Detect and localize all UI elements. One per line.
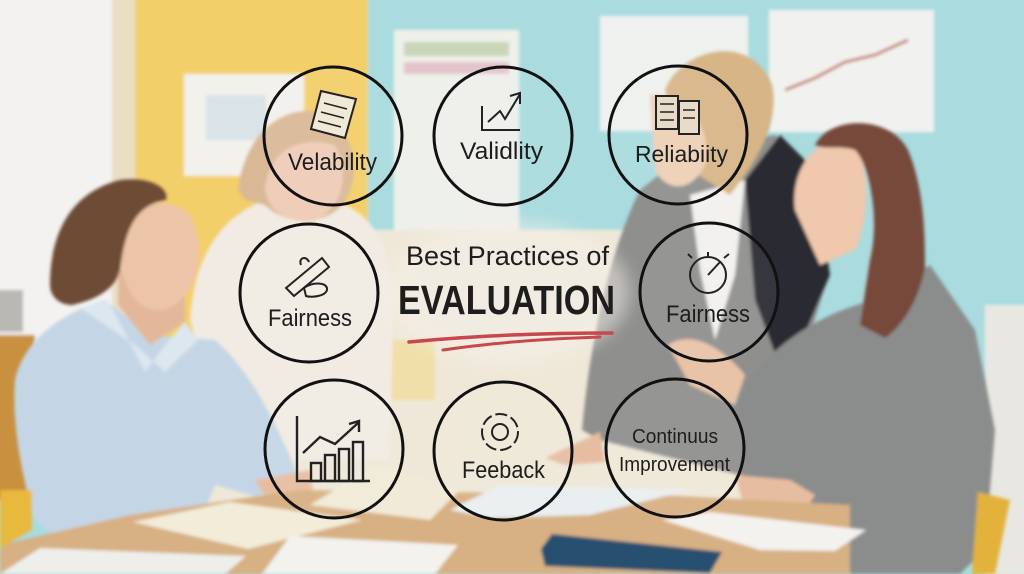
title line 2: EVALUATION bbox=[398, 277, 615, 323]
circle: Velability: Velability bbox=[288, 149, 377, 176]
circle: Continuous Improvement bbox=[606, 379, 744, 517]
red underline bbox=[409, 333, 612, 350]
title bbox=[398, 241, 615, 350]
person: standing woman in grey blazer bbox=[545, 51, 830, 480]
icon: rising arrow chart bbox=[482, 93, 520, 130]
wall poster left bbox=[184, 74, 304, 176]
icon: cycle gear bbox=[482, 414, 518, 450]
circle: Feedback: Feeback bbox=[462, 457, 546, 484]
icon: bar chart with arrow bbox=[297, 416, 370, 481]
circle: Fairness left bbox=[240, 224, 378, 362]
circle: Fairness right: Fairness bbox=[666, 301, 750, 328]
circle: Fairness left: Fairness bbox=[268, 305, 352, 332]
circle: Fairness right bbox=[640, 223, 778, 361]
title line 1: Best Practices of bbox=[406, 241, 609, 271]
person: left woman in blue shirt bbox=[14, 179, 315, 540]
soft white wash behind central title bbox=[386, 220, 630, 364]
circle: Velability bbox=[264, 67, 402, 205]
circle: Continuous Improvement: Continuus bbox=[632, 426, 718, 448]
person: right woman in grey sweater bbox=[668, 123, 995, 574]
icon: two documents bbox=[656, 96, 699, 134]
circle: Validity bbox=[434, 67, 572, 205]
person: back left woman in white shirt bbox=[190, 111, 393, 460]
circle: Validity: Validlity bbox=[460, 138, 543, 165]
circle: Reliability bbox=[609, 66, 747, 204]
circle: Reliability: Reliabiity bbox=[635, 141, 728, 167]
icon: document bbox=[311, 91, 356, 138]
circle: bar chart bbox=[265, 380, 403, 518]
circle: Feedback bbox=[434, 382, 572, 520]
circle: Continuous Improvement: Improvement bbox=[619, 454, 730, 476]
table with papers bbox=[0, 465, 1010, 574]
icon: gauge bbox=[688, 252, 729, 293]
icon: hand tool bbox=[286, 258, 329, 297]
